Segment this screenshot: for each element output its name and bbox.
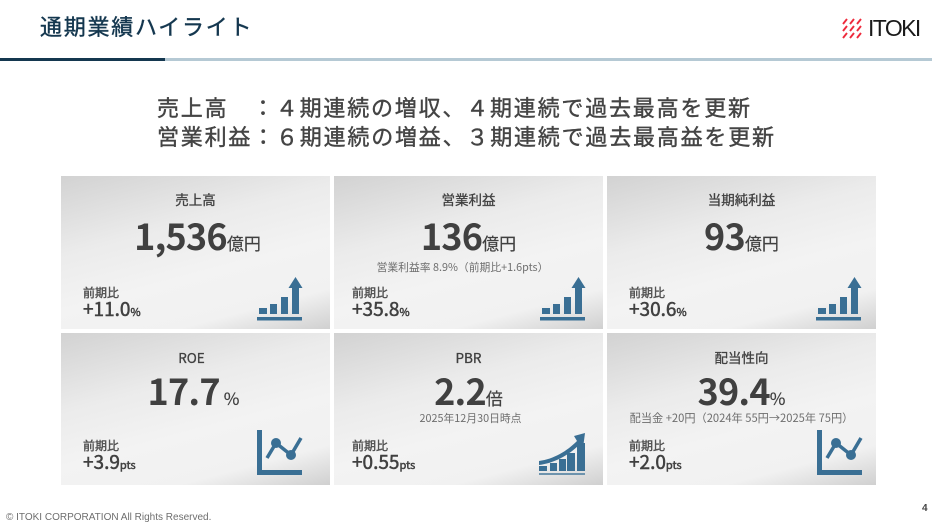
icon: rising bars bbox=[540, 277, 586, 320]
change: 前期比 bbox=[352, 437, 388, 454]
panel: 配当性向 bbox=[607, 333, 876, 485]
change: 前期比 bbox=[83, 437, 119, 454]
icon: growth curve bbox=[539, 433, 585, 475]
value: 136億円 bbox=[421, 209, 516, 261]
note: 2025年12月30日時点 bbox=[420, 410, 521, 426]
value: 17.7% bbox=[148, 364, 239, 416]
icon: rising bars bbox=[816, 277, 862, 320]
panel: 当期純利益 bbox=[607, 176, 876, 329]
copyright: © ITOKI CORPORATION All Rights Reserved. bbox=[6, 512, 211, 523]
headline text: 売上高 bbox=[157, 91, 228, 123]
heading: PBR bbox=[456, 347, 482, 367]
change: +0.55pts bbox=[352, 448, 415, 475]
heading: 営業利益 bbox=[442, 189, 496, 209]
headline text: 営業利益：６期連続の増益、３期連続で過去最高益を更新 bbox=[157, 120, 776, 152]
change: 前期比 bbox=[83, 284, 119, 301]
change: 前期比 bbox=[629, 437, 665, 454]
headline text bbox=[157, 91, 776, 152]
value: 93億円 bbox=[704, 209, 779, 261]
logo: ITOKI: ITOKI bbox=[868, 15, 920, 41]
heading: 売上高 bbox=[175, 189, 216, 209]
change: +30.6% bbox=[629, 295, 687, 322]
heading: 配当性向 bbox=[714, 347, 768, 367]
note: 営業利益率 8.9%（前期比+1.6pts） bbox=[377, 259, 548, 275]
heading: 当期純利益 bbox=[708, 189, 775, 209]
change: +2.0pts bbox=[629, 448, 682, 475]
value: 1,536億円 bbox=[134, 209, 261, 261]
panel: PBR bbox=[334, 333, 603, 485]
value: 39.4% bbox=[698, 364, 785, 416]
change: 前期比 bbox=[352, 284, 388, 301]
change: +35.8% bbox=[352, 295, 410, 322]
change: 前期比 bbox=[629, 284, 665, 301]
change: +11.0% bbox=[83, 295, 141, 322]
value: 2.2倍 bbox=[434, 364, 503, 416]
icon: rising bars bbox=[257, 277, 302, 320]
icon: line chart bbox=[817, 430, 862, 475]
logo: ITOKI bbox=[842, 15, 920, 41]
title: 通期業績ハイライト bbox=[40, 10, 253, 42]
note: 配当金 +20円（2024年 55円→2025年 75円） bbox=[630, 410, 853, 426]
change: +3.9pts bbox=[83, 448, 136, 475]
panel: 売上高 bbox=[61, 176, 330, 329]
header rule bbox=[0, 58, 932, 61]
panel: ROE bbox=[61, 333, 330, 485]
page number: 4 bbox=[922, 503, 928, 514]
headline text: ：４期連続の増収、４期連続で過去最高を更新 bbox=[252, 91, 752, 123]
icon: line chart bbox=[257, 430, 302, 475]
heading: ROE bbox=[178, 347, 205, 367]
panel: 営業利益 bbox=[334, 176, 603, 329]
